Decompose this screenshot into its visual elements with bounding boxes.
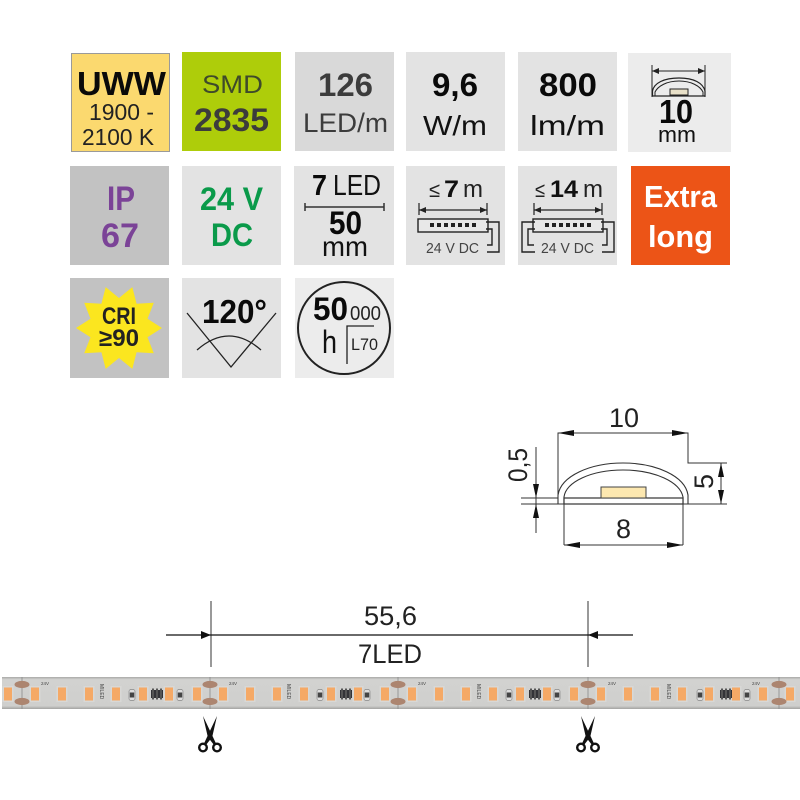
LED strip photo: MILED [475, 684, 481, 700]
tile: 10 mm width: mm [658, 122, 696, 147]
tile: SMD 2835 [182, 52, 281, 151]
cross-section dimension drawing: 10 [609, 403, 639, 433]
tile: IP 67: IP [107, 180, 135, 218]
tile: max 7 m single feed: m [463, 176, 483, 203]
tile: 800 lm/m [518, 52, 617, 151]
dimension: 55,6 mm over 7 LED: 55,6 [364, 601, 417, 631]
tile: 7 LED per 50 mm: 7 [312, 170, 327, 202]
tile: CRI 90 star: CRI [102, 303, 136, 330]
tile: 126 LED/m: LED/m [303, 108, 388, 138]
tile: CRI 90 star [70, 278, 169, 378]
tile: max 14 m double feed: ≤ [535, 179, 545, 202]
LED strip photo [2, 677, 800, 709]
LED strip photo: 24V [229, 681, 237, 686]
tile: IP 67 [70, 166, 169, 265]
tile: SMD 2835: SMD [202, 71, 263, 99]
LED strip photo: MILED [98, 684, 104, 700]
dimension: 55,6 mm over 7 LED: 7LED [358, 639, 422, 669]
LED strip photo: 24V [418, 681, 426, 686]
tile: max 7 m single feed [406, 166, 505, 265]
LED strip photo: MILED [665, 684, 671, 700]
tile: Extra long [631, 166, 730, 265]
LED strip photo: 24V [752, 681, 760, 686]
tile: UWW colour temperature: 1900 - [89, 99, 154, 125]
tile: max 14 m double feed: m [583, 176, 603, 203]
cross-section dimension drawing: 8 [616, 514, 631, 544]
tile: 50000 h L70 lifetime: h [322, 324, 337, 360]
tile: max 14 m double feed: 14 [550, 176, 579, 203]
tile: CRI 90 star: ≥90 [99, 325, 139, 352]
tile: 126 LED/m: 126 [318, 67, 373, 103]
tile: 50000 h L70 lifetime: 50 [313, 291, 348, 327]
tile: max 7 m single feed: 24 V DC [426, 240, 479, 257]
tile: max 14 m double feed [518, 166, 617, 265]
cross-section dimension drawing [503, 403, 727, 548]
tile: 24 V DC [182, 166, 281, 265]
tile: max 7 m single feed: ≤ [429, 179, 440, 202]
tile: 50000 h L70 lifetime: L70 [351, 335, 378, 354]
dimension: 55,6 mm over 7 LED [166, 601, 633, 669]
tile: max 14 m double feed: 24 V DC [541, 240, 594, 257]
tile: 800 lm/m: lm/m [530, 110, 605, 141]
tile: 800 lm/m: 800 [539, 67, 597, 103]
tile: 7 LED per 50 mm: mm [322, 231, 368, 262]
tile: IP 67: 67 [101, 217, 139, 255]
tile: UWW colour temperature: 2100 K [82, 124, 155, 150]
tile: UWW colour temperature [72, 54, 170, 152]
icon: scissors right cut mark [577, 716, 599, 751]
tile: 7 LED per 50 mm: LED [333, 170, 381, 202]
tile: Extra long: long [648, 219, 713, 254]
tile: 9,6 W/m: W/m [423, 110, 487, 141]
LED strip photo: 24V [41, 681, 49, 686]
LED strip photo: MILED [285, 684, 291, 700]
tile: max 7 m single feed: 7 [444, 176, 459, 203]
tile: Extra long: Extra [644, 179, 718, 214]
tile: 120 degree beam angle [182, 278, 281, 378]
cross-section dimension drawing: 0,5 [503, 448, 533, 482]
tile: SMD 2835: 2835 [194, 102, 269, 138]
icon: scissors left cut mark [199, 716, 221, 751]
tile: 24 V DC: 24 V [200, 181, 264, 217]
tile: 126 LED/m [295, 52, 394, 151]
tile: 10 mm width: 10 [659, 93, 693, 130]
tile: 9,6 W/m: 9,6 [432, 67, 478, 103]
tile: 50000 h L70 lifetime [295, 278, 394, 378]
tile: 7 LED per 50 mm [294, 166, 394, 265]
LED strip photo: 24V [608, 681, 616, 686]
tile: 10 mm width [628, 53, 731, 152]
tile: 7 LED per 50 mm: 50 [329, 205, 362, 241]
cross-section dimension drawing: 5 [689, 474, 719, 489]
tile: 9,6 W/m [406, 52, 505, 151]
tile: 120 degree beam angle: 120° [202, 293, 267, 330]
tile: 50000 h L70 lifetime: 000 [350, 303, 381, 325]
tile: UWW colour temperature: UWW [77, 65, 167, 102]
tile: 24 V DC: DC [211, 217, 253, 253]
